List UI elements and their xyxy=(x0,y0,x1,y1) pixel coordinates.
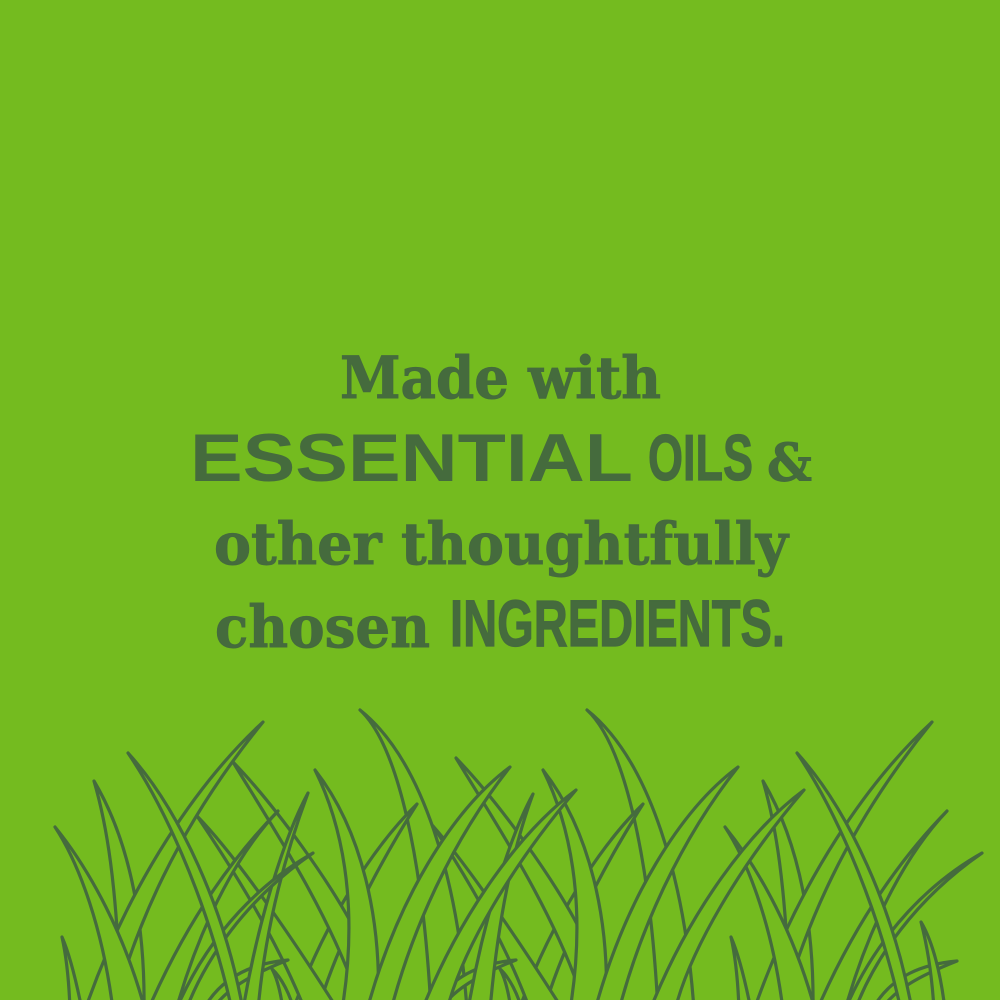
grass clump: back centre xyxy=(293,710,467,1000)
grass clump: left xyxy=(55,722,378,1000)
heading line: other thoughtfully: other thoughtfully xyxy=(214,510,790,578)
grass clump: middle xyxy=(367,710,804,1000)
heading word: chosen: chosen xyxy=(215,593,430,661)
heading word: OILS: OILS xyxy=(648,421,753,494)
heading word: ESSENTIAL: ESSENTIAL xyxy=(190,420,633,496)
heading line: Made with: Made with xyxy=(340,344,661,412)
heading word: INGREDIENTS: INGREDIENTS. xyxy=(450,586,785,660)
headline text block xyxy=(190,344,812,661)
heading glyph: ampersand: & xyxy=(767,433,812,494)
grass clump: right xyxy=(725,722,982,1000)
infographic canvas xyxy=(53,354,984,1000)
